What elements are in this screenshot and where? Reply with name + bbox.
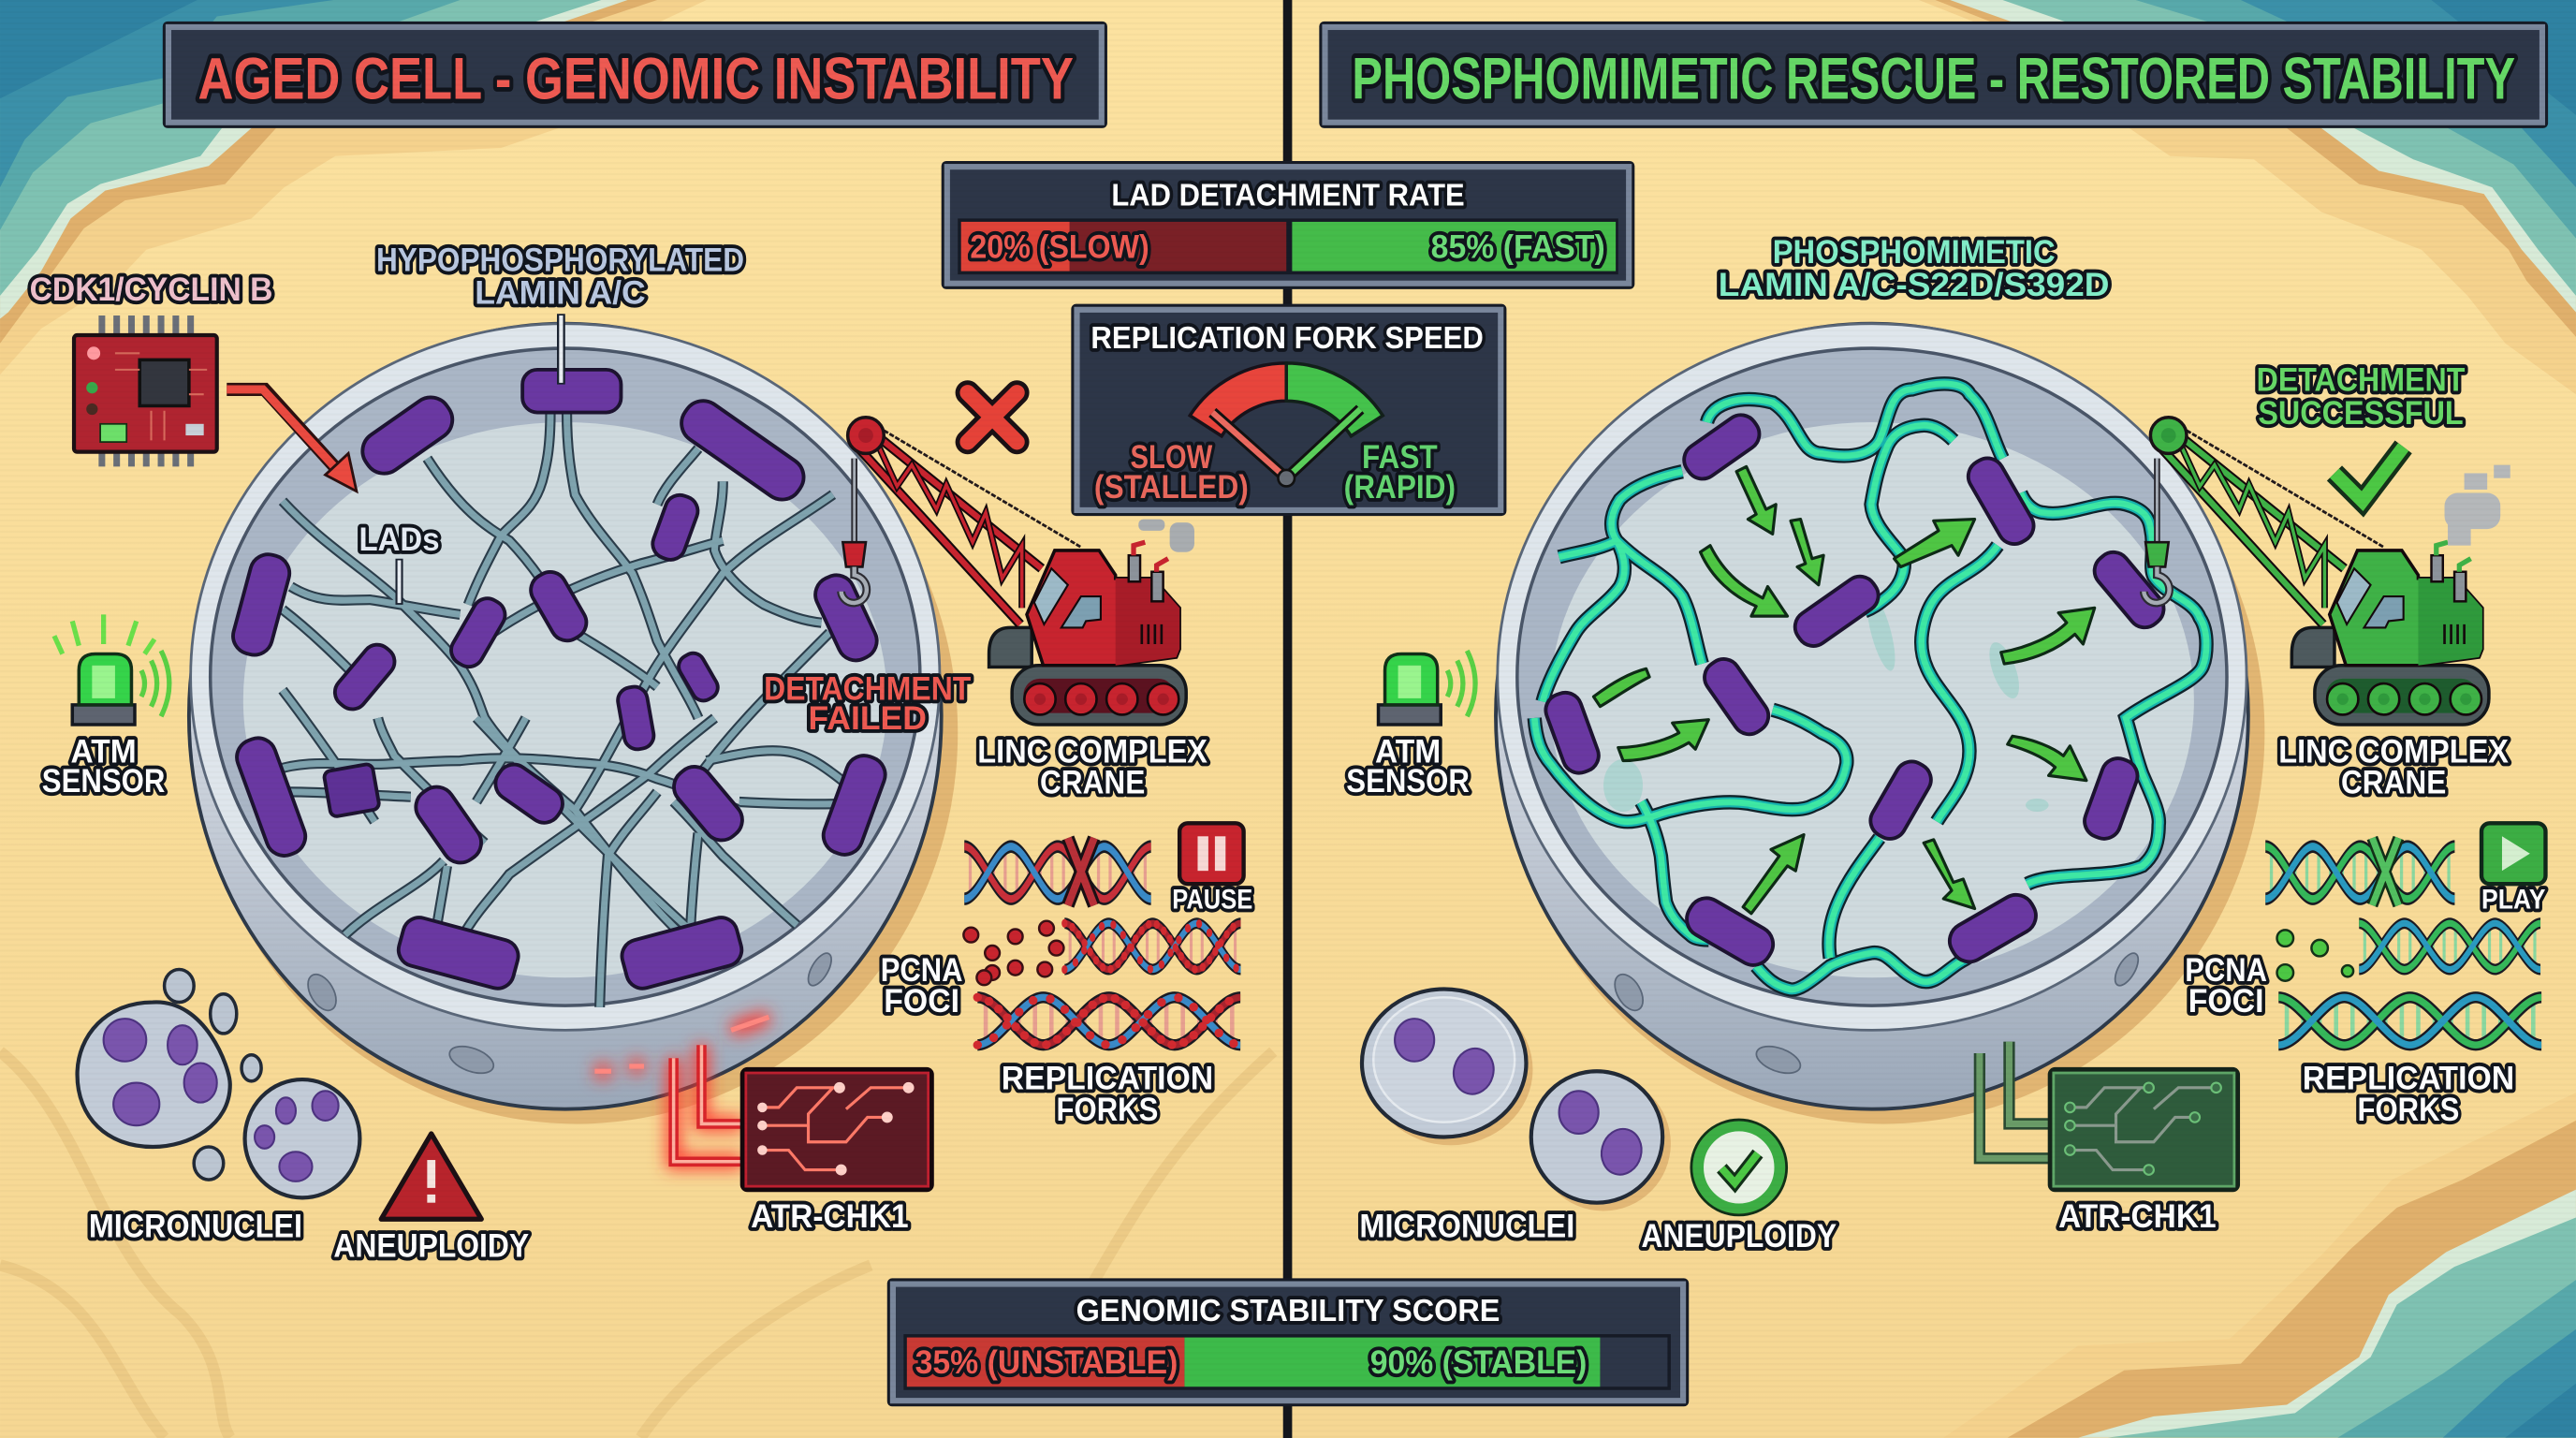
water: top-right corner (1919, 0, 2576, 394)
label: ATR-CHK1 left: ATR-CHK1 (751, 1198, 909, 1235)
sand streaks lower left (0, 1051, 1273, 1438)
water: bottom-right corner (1943, 1093, 2576, 1438)
label: LINC complex crane right: LINC COMPLEX (2278, 733, 2510, 770)
panel: replication fork speed gauge: (STALLED) (1094, 469, 1249, 506)
PCNA foci dots left (963, 921, 1063, 985)
icon: red X (968, 392, 1017, 442)
icon: check mark (2334, 447, 2404, 501)
flow arrows (1593, 466, 2095, 914)
panel: genomic stability score: 35% (UNSTABLE) (915, 1344, 1178, 1381)
teal smudges (1603, 592, 2049, 812)
dna: stalled fork (964, 838, 1151, 905)
label: ATM sensor left: SENSOR (42, 763, 165, 800)
label: ATM sensor right: SENSOR (1346, 763, 1470, 800)
phosphomimetic filaments (1534, 384, 2206, 990)
label: slow stalled: SLOW (1131, 439, 1213, 476)
label: aneuploidy right: ANEUPLOIDY (1641, 1218, 1837, 1255)
healthy cell small (1536, 1077, 1671, 1211)
label: LINC complex crane right: CRANE (2341, 765, 2446, 801)
dna: replication fork left (977, 997, 1240, 1045)
label: micronuclei right: MICRONUCLEI (1359, 1209, 1574, 1245)
icon: aneuploidy warning (381, 1134, 481, 1219)
label: ATM sensor left: ATM (71, 733, 137, 770)
panel: LAD detachment rate: 20% (SLOW) (970, 229, 1149, 266)
panel: LAD detachment rate (942, 161, 1634, 289)
title: aged cell (163, 22, 1107, 128)
panel: replication fork speed gauge (1071, 304, 1506, 516)
panel: LAD detachment rate: 85% (FAST) (1431, 229, 1605, 266)
icon: aneuploidy ok (1691, 1120, 1787, 1215)
icon: pause (1179, 823, 1244, 884)
label: detachment failed: DETACHMENT (764, 671, 972, 708)
label: detachment failed: FAILED (809, 700, 927, 737)
smoke (1138, 520, 1194, 552)
smoke (2445, 465, 2510, 546)
gauge: green half (1286, 363, 1383, 436)
gauge: hub (1278, 470, 1295, 486)
label: LINC complex crane right (2278, 733, 2510, 801)
label: hypophosphorylated lamin (376, 242, 744, 312)
panel: LAD detachment rate: LAD DETACHMENT RATE (1111, 178, 1465, 213)
label: replication forks left: REPLICATION (1002, 1061, 1213, 1097)
label: LADs: LADs (359, 521, 440, 558)
label: LINC complex crane left: LINC COMPLEX (977, 733, 1208, 770)
circuit: ATR-CHK1 left (594, 1017, 931, 1190)
gauge: fast needle (1286, 409, 1360, 478)
pointer: LADs (397, 559, 402, 605)
label: hypophosphorylated lamin: HYPOPHOSPHORYLATED (376, 242, 744, 279)
label: phosphomimetic lamin: PHOSPHOMIMETIC (1773, 234, 2056, 271)
wire glow (594, 1017, 768, 1162)
gauge: red half (1190, 363, 1286, 436)
panel: genomic stability score: GENOMIC STABILITY SCORE (1076, 1294, 1500, 1328)
water: top-left corner (0, 0, 707, 374)
healthy cell large (1368, 994, 1532, 1145)
label: replication forks left: FORKS (1057, 1092, 1158, 1128)
label: PCNA foci right: FOCI (2188, 983, 2263, 1020)
label: detachment successful (2257, 362, 2466, 432)
repaired mark (2372, 838, 2398, 905)
lamin capsules: aged (229, 370, 890, 992)
label: detachment successful: DETACHMENT (2257, 362, 2466, 399)
label: fast rapid: FAST (1362, 439, 1438, 476)
dna: PCNA fork right (2359, 923, 2540, 970)
icon: ATM sensor left (54, 614, 169, 725)
micronuclei left (78, 969, 359, 1197)
label: replication forks right: FORKS (2358, 1092, 2459, 1128)
panel: genomic stability score: 90% (STABLE) (1370, 1344, 1587, 1381)
label: PCNA foci right (2185, 952, 2267, 1020)
nucleus dish: rescue (1496, 324, 2264, 1123)
dna: PCNA fork left (1064, 923, 1240, 970)
label: PCNA foci left: PCNA (881, 952, 963, 989)
crane: LINC complex aged (842, 418, 1194, 725)
label: ATR-CHK1 right: ATR-CHK1 (2058, 1198, 2217, 1235)
label: micronuclei left: MICRONUCLEI (89, 1209, 302, 1245)
gauge: slow needle (1212, 413, 1286, 478)
tangled lamin filaments (279, 413, 846, 1007)
break mark (1068, 838, 1094, 905)
lamin capsules: rescue (1541, 408, 2171, 972)
label: replication forks right: REPLICATION (2303, 1061, 2514, 1097)
label: phosphomimetic lamin: LAMIN A/C-S22D/S392D (1719, 267, 2110, 303)
PCNA foci dots right (2277, 930, 2353, 981)
centre divider (1283, 0, 1292, 1438)
panel: replication fork speed gauge: (RAPID) (1344, 469, 1456, 506)
pointer: lamin (559, 314, 564, 385)
label: ATM sensor left (42, 733, 165, 800)
micronuclei right (1362, 990, 1671, 1211)
damaged cell (78, 1002, 230, 1147)
label: replication forks left (1002, 1061, 1213, 1128)
label: replication forks right (2303, 1061, 2514, 1128)
label: LINC complex crane left: CRANE (1040, 765, 1145, 801)
arrow: CDK1 to lamina (227, 389, 357, 492)
label: ATM sensor right (1346, 733, 1470, 800)
label: PCNA foci left: FOCI (884, 983, 959, 1020)
dna: restarted fork (2265, 838, 2454, 905)
label: play: PLAY (2481, 885, 2546, 916)
label: CDK1: CDK1/CYCLIN B (30, 271, 272, 308)
panel: genomic stability score (887, 1278, 1689, 1406)
dna: replication fork right (2278, 997, 2541, 1045)
title: aged cell: AGED CELL - GENOMIC INSTABILITY (198, 46, 1074, 111)
label: detachment failed (764, 671, 972, 737)
label: pause: PAUSE (1172, 885, 1252, 916)
icon: ATM sensor right (1379, 651, 1475, 725)
small cell (245, 1079, 359, 1197)
icon: play (2481, 823, 2545, 884)
label: aneuploidy left: ANEUPLOIDY (333, 1228, 529, 1265)
label: hypophosphorylated lamin: LAMIN A/C (475, 275, 646, 312)
label: phosphomimetic lamin (1719, 234, 2110, 303)
label: detachment successful: SUCCESSFUL (2258, 395, 2464, 432)
crane: LINC complex rescue (2144, 418, 2510, 725)
label: PCNA foci left (881, 952, 963, 1020)
label: LINC complex crane left (977, 733, 1208, 801)
label: ATM sensor right: ATM (1375, 733, 1441, 770)
panel: replication fork speed gauge: REPLICATION FORK SPEED (1090, 321, 1484, 356)
title: phosphomimetic rescue (1319, 22, 2548, 128)
label: PCNA foci right: PCNA (2185, 952, 2267, 989)
icon: CDK1 chip (74, 315, 217, 466)
nucleus dish: aged cell (189, 324, 958, 1123)
circuit: ATR-CHK1 right (1980, 1042, 2237, 1190)
stray micronuclei (165, 969, 261, 1180)
